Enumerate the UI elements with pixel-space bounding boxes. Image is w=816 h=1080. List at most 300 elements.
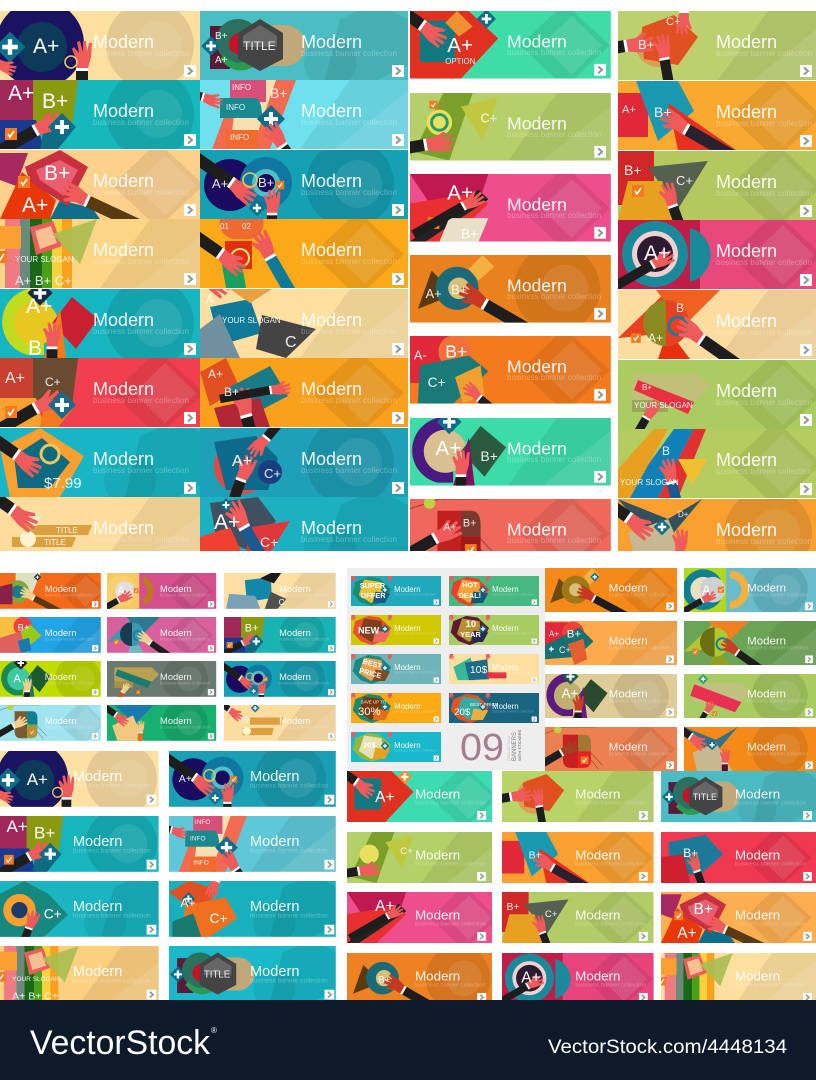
logo wordmark: VectorStock [30, 1024, 211, 1062]
heading: business banner collection [716, 328, 812, 337]
heading [301, 171, 397, 197]
graphic [200, 489, 415, 596]
banner: pink arm [347, 886, 498, 950]
banner: blue rings [141, 737, 336, 853]
heading: Modern [716, 381, 777, 401]
graphic [0, 875, 174, 975]
banner: coral squares [0, 358, 200, 427]
arrow button [392, 343, 404, 355]
heading [45, 628, 95, 641]
banner: save 30% [351, 674, 441, 723]
heading: Modern [301, 171, 362, 191]
heading [716, 381, 812, 407]
arrow button [639, 932, 648, 941]
heading: business banner collection [160, 680, 211, 685]
graphic: C [285, 334, 297, 351]
heading [94, 382, 188, 403]
graphic: B+ [529, 851, 542, 862]
graphic: C+ [45, 375, 61, 389]
heading: business banner collection [492, 632, 534, 636]
heading: business banner collection [735, 861, 806, 867]
graphic [0, 497, 200, 551]
arrow button [92, 689, 98, 695]
graphic: B [676, 301, 684, 315]
heading [45, 716, 95, 729]
arrow button [666, 708, 674, 716]
heading: Modern [575, 968, 620, 983]
heading: Modern [507, 194, 567, 214]
graphic [518, 722, 675, 782]
graphic [0, 808, 157, 893]
graphic [598, 212, 816, 301]
graphic: OPTION [445, 57, 476, 66]
graphic [195, 683, 336, 741]
heading: business banner collection [716, 119, 812, 128]
heading: Modern [394, 624, 421, 633]
arrow button [594, 308, 606, 320]
heading: business banner collection [747, 593, 809, 599]
heading [575, 847, 646, 867]
heading: Modern [575, 786, 620, 801]
heading [492, 702, 534, 714]
arrow button [325, 860, 334, 869]
heading: business banner collection [735, 921, 806, 927]
heading: business banner collection [716, 537, 812, 546]
heading [160, 584, 211, 597]
arrow button [639, 872, 648, 881]
heading [575, 786, 646, 806]
arrow button [434, 638, 439, 644]
graphic: TITLE [693, 792, 717, 802]
heading [716, 32, 812, 58]
heading [73, 964, 151, 984]
graphic: A+ [375, 898, 395, 915]
heading [609, 583, 670, 599]
heading: business banner collection [73, 977, 151, 984]
heading: Modern [250, 834, 299, 850]
graphic [410, 166, 610, 250]
banner: orange triangle [545, 563, 677, 626]
heading: business banner collection [609, 646, 670, 652]
heading: business banner collection [507, 455, 601, 464]
graphic [81, 688, 208, 763]
heading: business banner collection [507, 130, 601, 139]
heading [575, 907, 646, 927]
heading: business banner collection [279, 592, 330, 597]
graphic [368, 491, 610, 583]
heading: Modern [93, 171, 154, 191]
heading [415, 907, 486, 927]
heading: Modern [301, 101, 362, 121]
graphic [347, 886, 498, 950]
graphic: HOT [462, 580, 478, 589]
graphic: SAVE UP TO [361, 699, 387, 704]
graphic [169, 834, 343, 944]
heading: Modern [160, 584, 192, 594]
heading [747, 583, 809, 599]
banner: aqua title hexagon [200, 11, 408, 80]
heading: business banner collection [492, 671, 534, 675]
graphic: INFO [226, 103, 245, 112]
graphic: YOUR SLOGAN [620, 478, 679, 487]
graphic: B+ [624, 162, 642, 178]
heading: Modern [45, 672, 76, 682]
graphic: B+ [683, 846, 698, 860]
heading: business banner collection [415, 861, 486, 867]
heading [279, 716, 330, 729]
graphic: C [279, 597, 285, 607]
graphic [0, 80, 194, 149]
heading: Modern [492, 624, 519, 633]
heading: business banner collection [507, 48, 601, 57]
heading: business banner collection [492, 710, 534, 714]
banner: yellow strips [0, 946, 174, 1002]
graphic: A+ [179, 773, 192, 785]
graphic [618, 421, 816, 545]
graphic [667, 562, 808, 623]
banner: orange dark star [649, 704, 816, 801]
heading: Modern [415, 847, 460, 862]
heading [394, 663, 436, 675]
heading [507, 194, 601, 220]
graphic: INFO [195, 819, 210, 826]
heading [394, 741, 436, 753]
heading: business banner collection [575, 800, 646, 806]
banner: coral network [518, 722, 677, 782]
banner: green stripes [618, 421, 816, 545]
arrow button [800, 553, 812, 565]
heading: business banner collection [716, 467, 812, 476]
heading: Modern [45, 628, 76, 638]
heading: business banner collection [575, 921, 646, 927]
banner: green ribbon [614, 352, 816, 466]
heading [716, 172, 812, 198]
heading [94, 452, 188, 473]
arrow button [477, 993, 486, 1002]
heading [301, 518, 397, 544]
heading: business banner collection [250, 782, 328, 789]
banner: cream slogan [224, 573, 336, 610]
heading: business banner collection [575, 861, 646, 867]
banner: light blue info [200, 80, 408, 149]
arrow button [184, 551, 196, 563]
heading [716, 450, 812, 476]
heading: Modern [394, 585, 421, 594]
heading: Modern [492, 663, 519, 672]
heading [609, 636, 670, 652]
graphic [0, 358, 200, 427]
graphic [106, 656, 208, 717]
arrow button [92, 733, 98, 739]
graphic: B [662, 444, 670, 458]
heading: business banner collection [394, 632, 436, 636]
collection count: 09 banners with stickers [460, 727, 522, 769]
graphic: B+ [215, 31, 228, 42]
arrow button [434, 716, 439, 722]
arrow button [392, 134, 404, 146]
heading [250, 834, 328, 854]
heading: Modern [716, 241, 777, 261]
heading: Modern [575, 847, 620, 862]
graphic: A [206, 292, 214, 306]
banner: blue rings [166, 132, 408, 276]
graphic [307, 744, 498, 829]
heading: business banner collection [93, 49, 189, 58]
arrow button [92, 645, 98, 651]
heading [45, 584, 95, 597]
graphic: INFO [230, 133, 249, 142]
heading: Modern [492, 702, 519, 711]
graphic [200, 350, 404, 490]
graphic [0, 946, 174, 1002]
graphic: TITLE [44, 538, 66, 547]
banner: sale 10$ [449, 635, 539, 684]
heading [250, 899, 328, 919]
heading: business banner collection [507, 536, 601, 545]
heading: Modern [747, 689, 786, 701]
arrow button [184, 482, 196, 494]
graphic: 20$ [454, 707, 471, 718]
arrow button [800, 344, 812, 356]
graphic: A+ B+ C+ [12, 990, 58, 1002]
banner: teal B+ [0, 808, 159, 893]
graphic: A+ [677, 925, 697, 942]
heading: Modern [73, 964, 122, 980]
banner: sky blue [0, 617, 112, 653]
heading: Modern [394, 663, 421, 672]
heading [747, 742, 809, 758]
heading: business banner collection [301, 257, 397, 266]
heading [747, 636, 809, 652]
graphic: A+ [232, 453, 252, 470]
banner: pink rings [83, 569, 216, 624]
arrow button [184, 273, 196, 285]
heading: business banner collection [735, 982, 806, 988]
banner: peach gem [661, 886, 816, 959]
banner: aqua info [130, 814, 343, 918]
heading: Modern [747, 583, 786, 595]
heading: business banner collection [415, 921, 486, 927]
graphic: A+ [214, 511, 240, 534]
graphic [684, 621, 816, 685]
arrow button [800, 274, 812, 286]
collection count: 09 banners with stickers: 09 [460, 727, 504, 769]
banner: new [351, 596, 441, 645]
heading: business banner collection [93, 466, 189, 475]
graphic: B+ [654, 104, 672, 120]
heading: Modern [716, 172, 777, 192]
heading: business banner collection [394, 749, 436, 753]
graphic: A+ [5, 370, 25, 387]
heading: Modern [301, 32, 362, 52]
heading [73, 834, 151, 854]
graphic: C+ [559, 645, 571, 655]
arrow button [800, 65, 812, 77]
arrow button [325, 795, 334, 804]
heading [735, 786, 806, 806]
graphic [502, 886, 653, 978]
graphic: C+ [676, 173, 693, 188]
panel: lower left banners [0, 737, 343, 1009]
heading [609, 742, 670, 758]
graphic [563, 467, 812, 611]
graphic [412, 410, 621, 540]
heading [73, 899, 151, 919]
graphic [657, 953, 816, 1004]
banner: teal B+ [0, 80, 200, 149]
banner: teal lime A+ [0, 289, 200, 358]
banner: pink ring [487, 947, 654, 1013]
graphic [649, 704, 808, 801]
arrow button [803, 932, 812, 941]
heading: business banner collection [492, 593, 534, 597]
heading: business banner collection [160, 592, 211, 597]
graphic: A+ [375, 789, 395, 806]
arrow button [208, 733, 214, 739]
arrow button [184, 204, 196, 216]
graphic: YOUR SLOGAN [12, 976, 60, 983]
banner: amber 01 02 [155, 203, 408, 326]
arrow button [594, 389, 606, 401]
heading: business banner collection [609, 752, 670, 758]
banner: lime [0, 656, 101, 726]
banner: hot deal [449, 557, 539, 606]
heading: business banner collection [93, 396, 189, 405]
heading [301, 310, 397, 336]
graphic: B+ [18, 623, 29, 633]
graphic: NEW [358, 625, 380, 635]
graphic [206, 652, 325, 727]
heading: business banner collection [160, 724, 211, 729]
heading: business banner collection [93, 327, 189, 336]
heading: business banner collection [250, 847, 328, 854]
banner: green star [81, 688, 216, 763]
graphic: OFFER [361, 591, 386, 600]
arrow button [594, 64, 606, 76]
registered mark: ® [211, 1026, 217, 1035]
banner: red blue [661, 826, 816, 917]
banner: green ribbon [684, 668, 816, 743]
heading [507, 519, 601, 545]
heading [94, 104, 188, 125]
heading [716, 102, 812, 128]
graphic: YOUR SLOGAN [15, 255, 74, 264]
banner: green arm [304, 832, 506, 888]
graphic: A+ [208, 367, 223, 381]
arrow button [147, 795, 156, 804]
graphic: B+ [34, 824, 55, 843]
arrow button [477, 872, 486, 881]
heading: business banner collection [45, 636, 95, 641]
heading [94, 520, 188, 542]
heading: Modern [575, 907, 620, 922]
heading: Modern [415, 786, 460, 801]
panel: small banner grid [0, 569, 336, 763]
heading: business banner collection [93, 257, 189, 266]
banner: coral network [368, 491, 611, 583]
heading: business banner collection [45, 680, 95, 685]
heading: business banner collection [609, 699, 670, 705]
heading [301, 379, 397, 405]
heading: Modern [415, 907, 460, 922]
heading: Modern [735, 847, 780, 862]
graphic [449, 596, 491, 645]
heading: business banner collection [250, 977, 328, 984]
graphic: B+ [481, 449, 498, 464]
heading: Modern [747, 742, 786, 754]
banner: teal price [0, 428, 200, 497]
heading: business banner collection [279, 636, 330, 641]
banner: green hands [456, 771, 661, 853]
heading [415, 786, 486, 806]
banner: orange B+ [347, 946, 492, 1024]
graphic: A+ [33, 35, 59, 58]
graphic: 10 [466, 619, 476, 630]
heading: business banner collection [279, 680, 330, 685]
heading: business banner collection [394, 710, 436, 714]
graphic: A+ [521, 970, 541, 987]
heading: business banner collection [716, 398, 812, 407]
banner: yellow calculator strips [0, 219, 215, 289]
arrow button [594, 146, 606, 158]
banner: aqua rings A [667, 562, 816, 623]
graphic: A+ [22, 194, 48, 217]
heading: Modern [716, 520, 777, 540]
arrow button [392, 65, 404, 77]
banner: teal rings [206, 652, 336, 727]
heading [716, 520, 812, 546]
arrow button [434, 677, 439, 683]
graphic [0, 150, 200, 219]
heading: Modern [716, 450, 777, 470]
graphic: B+ [638, 37, 654, 52]
graphic: 01 [220, 222, 229, 231]
arrow button [328, 689, 334, 695]
heading [507, 113, 601, 139]
graphic [618, 73, 816, 175]
graphic [200, 80, 408, 149]
heading: Modern [492, 585, 519, 594]
graphic [155, 203, 404, 326]
graphic: A+ [215, 55, 228, 66]
collection count: 09 banners with stickers: WITH STICKERS [517, 729, 522, 761]
banner: green triangles [502, 886, 654, 978]
graphic: A+ [549, 628, 559, 638]
graphic: 30% [358, 706, 381, 718]
heading: Modern [301, 379, 362, 399]
banner: teal orange [169, 834, 343, 944]
graphic: B+ [258, 175, 274, 190]
graphic: TITLE [204, 970, 231, 981]
graphic: INFO [232, 83, 251, 92]
graphic: C+ [666, 16, 680, 28]
graphic [614, 352, 816, 466]
heading: business banner collection [507, 373, 601, 382]
heading: Modern [609, 742, 648, 754]
heading: Modern [507, 113, 567, 133]
graphic: 10$ [470, 665, 487, 676]
heading [250, 964, 328, 984]
arrow button [532, 599, 537, 605]
arrow button [594, 471, 606, 483]
graphic [304, 832, 506, 888]
graphic: C+ [481, 110, 497, 125]
heading: business banner collection [747, 646, 809, 652]
heading: business banner collection [301, 466, 397, 475]
banner: cream A+ [0, 742, 159, 858]
arrow button [805, 708, 813, 716]
heading: Modern [747, 636, 786, 648]
